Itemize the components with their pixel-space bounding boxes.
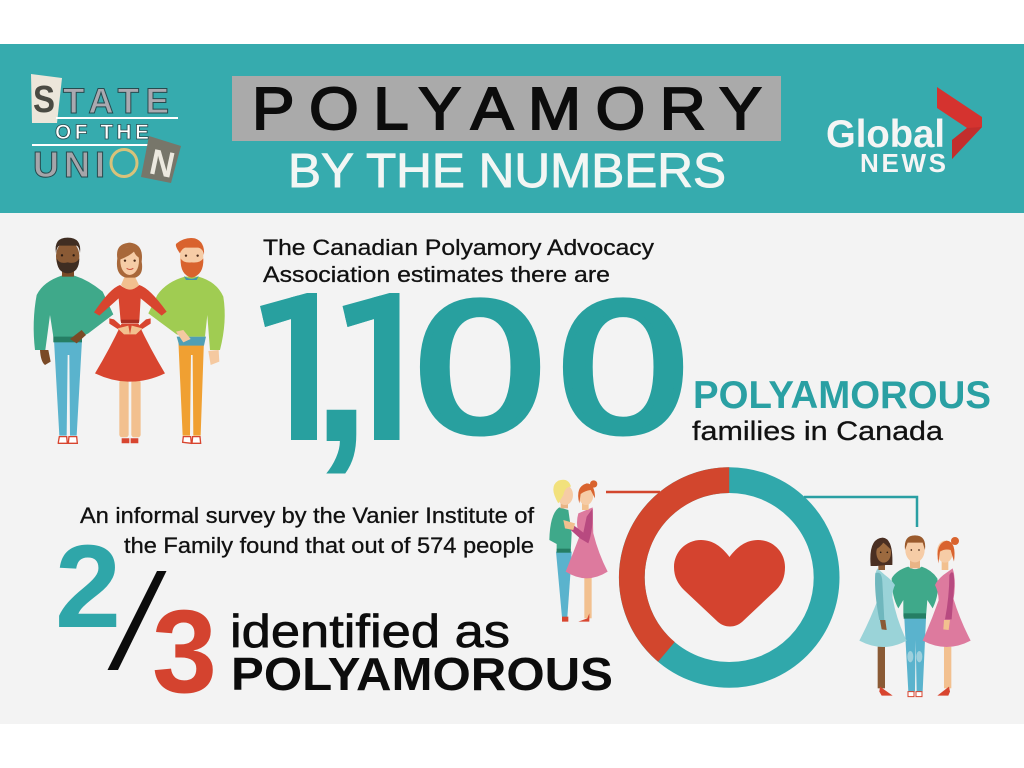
logo: Global News: NEWS bbox=[860, 148, 946, 178]
label: polyamorous families bbox=[692, 374, 991, 446]
big number 1,100: 1 bbox=[326, 250, 442, 485]
woman's forearms bbox=[109, 318, 151, 330]
logo: State of the Union: UNI bbox=[33, 144, 105, 185]
logo: State of the Union: N bbox=[146, 141, 178, 186]
label: identified as polyamorous: identified as bbox=[230, 605, 510, 657]
logo: Global News bbox=[826, 87, 982, 178]
label: polyamorous families: families in Canada bbox=[692, 416, 944, 446]
label: identified as polyamorous bbox=[230, 605, 613, 700]
fraction two thirds bbox=[55, 521, 217, 718]
body text: survey: An informal survey by the Vanier Institute of bbox=[80, 503, 535, 528]
big number 1,100: 0 bbox=[552, 268, 694, 473]
label: polyamorous families: POLYAMOROUS bbox=[693, 374, 991, 417]
logo: Global News: Global bbox=[826, 113, 945, 156]
header band bbox=[0, 44, 1024, 213]
title box: Polyamory: POLYAMORY bbox=[252, 76, 762, 142]
man left bbox=[34, 238, 113, 443]
logo: State of the Union: TATE bbox=[63, 82, 169, 121]
logo: State of the Union bbox=[31, 74, 181, 186]
woman right bbox=[923, 537, 971, 696]
connector: teal line bbox=[804, 497, 917, 527]
illustration: couple bbox=[549, 480, 608, 622]
fraction two thirds: 3 bbox=[152, 586, 217, 718]
illustration: three people bbox=[34, 238, 225, 443]
big number 1,100: , bbox=[312, 251, 370, 486]
illustration: trio bbox=[859, 535, 971, 697]
body text: survey: the Family found that out of 574 people bbox=[124, 533, 534, 558]
icon: heart bbox=[674, 540, 785, 626]
woman centre bbox=[94, 243, 167, 443]
man right bbox=[148, 238, 225, 443]
man centre bbox=[892, 535, 938, 697]
big number 1,100: 0 bbox=[409, 268, 551, 473]
woman left bbox=[859, 538, 907, 696]
big number 1,100 bbox=[260, 293, 684, 474]
connector: red line bbox=[606, 491, 660, 493]
body text: advocacy estimate: Association estimates there are bbox=[263, 262, 610, 287]
fraction two thirds: 2 bbox=[55, 521, 121, 653]
donut chart bbox=[632, 480, 827, 675]
body text: advocacy estimate: The Canadian Polyamory Advocacy bbox=[263, 235, 654, 260]
big number 1,100: 1 bbox=[243, 250, 360, 485]
body text: advocacy estimate bbox=[263, 235, 654, 287]
logo: State of the Union: S bbox=[33, 79, 55, 121]
logo: State of the Union: OF THE bbox=[55, 121, 149, 144]
label: identified as polyamorous: POLYAMOROUS bbox=[231, 648, 613, 700]
body text: survey bbox=[80, 503, 535, 558]
subtitle: BY THE NUMBERS bbox=[288, 145, 726, 198]
